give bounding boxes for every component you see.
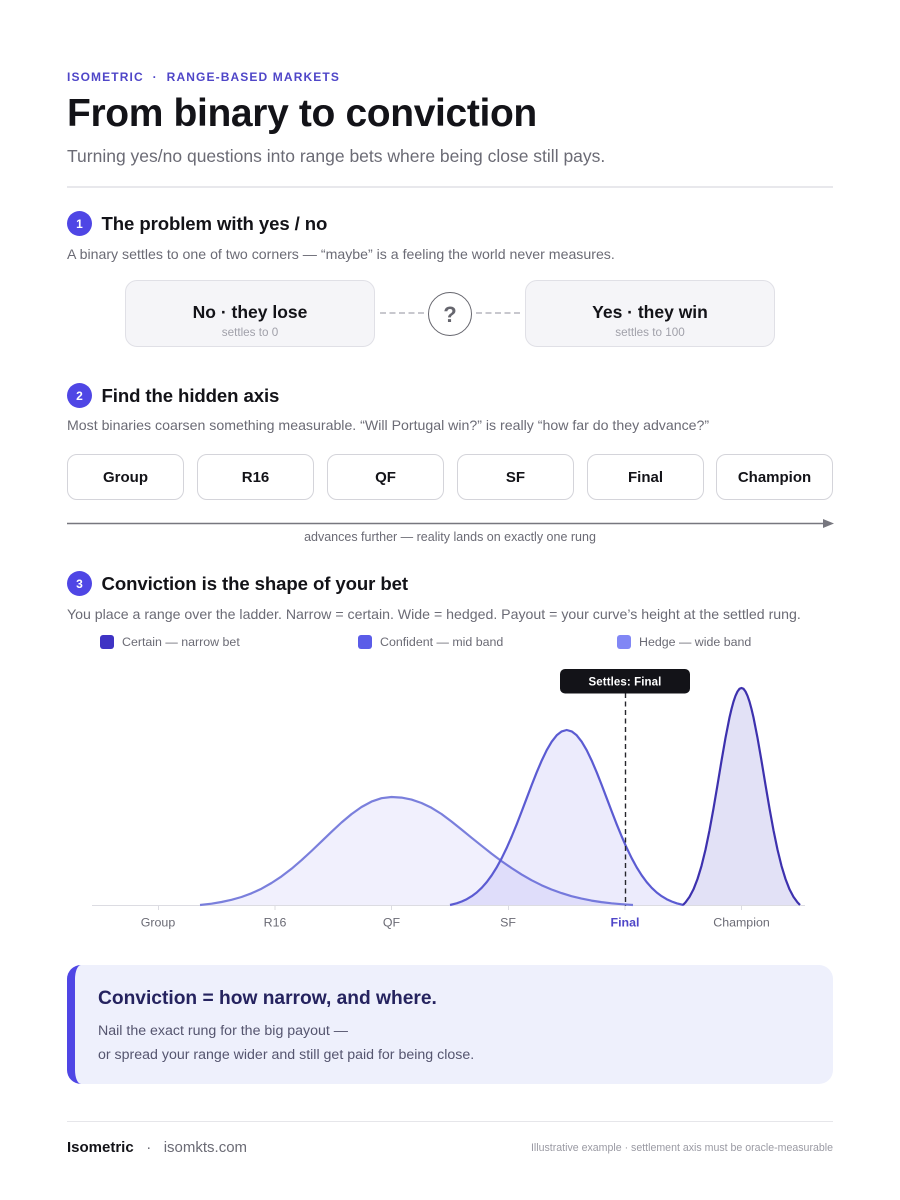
callout body — [98, 1023, 474, 1062]
icon: question mark circle: ? — [443, 302, 457, 327]
axis labels: SF — [500, 916, 516, 930]
callout — [67, 965, 833, 1084]
axis labels: Group — [141, 916, 175, 930]
section 1 number badge — [67, 211, 92, 236]
footer brand: Isometric · isomkts.com — [67, 1139, 247, 1156]
settlement marker line — [624, 693, 626, 906]
section 1 heading: The problem with yes / no — [102, 213, 327, 234]
axis labels: Final — [611, 916, 639, 930]
axis labels: R16 — [264, 916, 286, 930]
section 3 description: You place a range over the ladder. Narrow = certain. Wide = hedged. Payout = your curve’s height at the settled rung. — [67, 606, 801, 622]
curve: certain narrow bet — [683, 688, 800, 905]
rung: Final: Final — [628, 469, 663, 486]
section 2 number badge: 2 — [76, 389, 83, 403]
section 3 number badge — [67, 571, 92, 596]
rung: Group: Group — [103, 469, 148, 486]
title: From binary to conviction — [67, 92, 537, 134]
section 1 number badge: 1 — [76, 217, 83, 231]
callout body: or spread your range wider and still get paid for being close. — [98, 1046, 474, 1062]
rung: R16: R16 — [242, 469, 269, 486]
rung: SF: SF — [506, 469, 525, 486]
section 2 heading: Find the hidden axis — [102, 385, 279, 406]
card: yes outcome: settles to 100 — [615, 326, 685, 338]
settlement tag — [560, 669, 690, 694]
icon: question mark circle — [428, 292, 472, 336]
section 2 description: Most binaries coarsen something measurable. “Will Portugal win?” is really “how far do they advance?” — [67, 417, 709, 433]
ladder rungs — [67, 454, 833, 500]
callout heading: Conviction = how narrow, and where. — [98, 988, 437, 1009]
callout body: Nail the exact rung for the big payout — — [98, 1023, 348, 1039]
connector: dashed right — [476, 312, 520, 314]
settlement tag: Settles: Final — [589, 676, 661, 688]
rung: Champion — [716, 454, 833, 500]
legend: certain: Certain — narrow bet — [122, 635, 240, 649]
rung: Final — [587, 454, 704, 500]
rung: QF: QF — [375, 469, 396, 486]
rung: SF — [457, 454, 574, 500]
card: no outcome — [125, 280, 375, 347]
legend: confident: Confident — mid band — [380, 635, 503, 649]
axis labels: Champion — [713, 916, 770, 930]
rung: R16 — [197, 454, 314, 500]
rung: QF — [327, 454, 444, 500]
curve: hedge wide band — [200, 797, 633, 905]
card: yes outcome — [525, 280, 775, 347]
card: yes outcome: Yes · they win — [592, 302, 708, 322]
section 3 heading: Conviction is the shape of your bet — [102, 573, 408, 594]
card: no outcome: settles to 0 — [222, 326, 278, 338]
section 1 description: A binary settles to one of two corners — “maybe” is a feeling the world never measures. — [67, 246, 615, 262]
legend: hedge: Hedge — wide band — [639, 635, 751, 649]
axis caption: advances further — reality lands on exactly one rung — [304, 530, 596, 544]
section 3 number badge: 3 — [76, 577, 83, 591]
eyebrow: ISOMETRIC · RANGE-BASED MARKETS — [67, 70, 340, 84]
connector: dashed left — [380, 312, 424, 314]
footer note: Illustrative example · settlement axis must be oracle-measurable — [531, 1142, 833, 1154]
curve: confident mid band — [450, 730, 683, 905]
chart: conviction curves — [92, 669, 805, 930]
arrow: advancing axis — [67, 519, 834, 528]
subtitle: Turning yes/no questions into range bets where being close still pays. — [67, 146, 605, 166]
card: no outcome: No · they lose — [193, 302, 307, 322]
axis labels — [141, 916, 770, 930]
section 2 number badge — [67, 383, 92, 408]
rung: Group — [67, 454, 184, 500]
axis labels: QF — [383, 916, 401, 930]
rung: Champion: Champion — [738, 469, 811, 486]
